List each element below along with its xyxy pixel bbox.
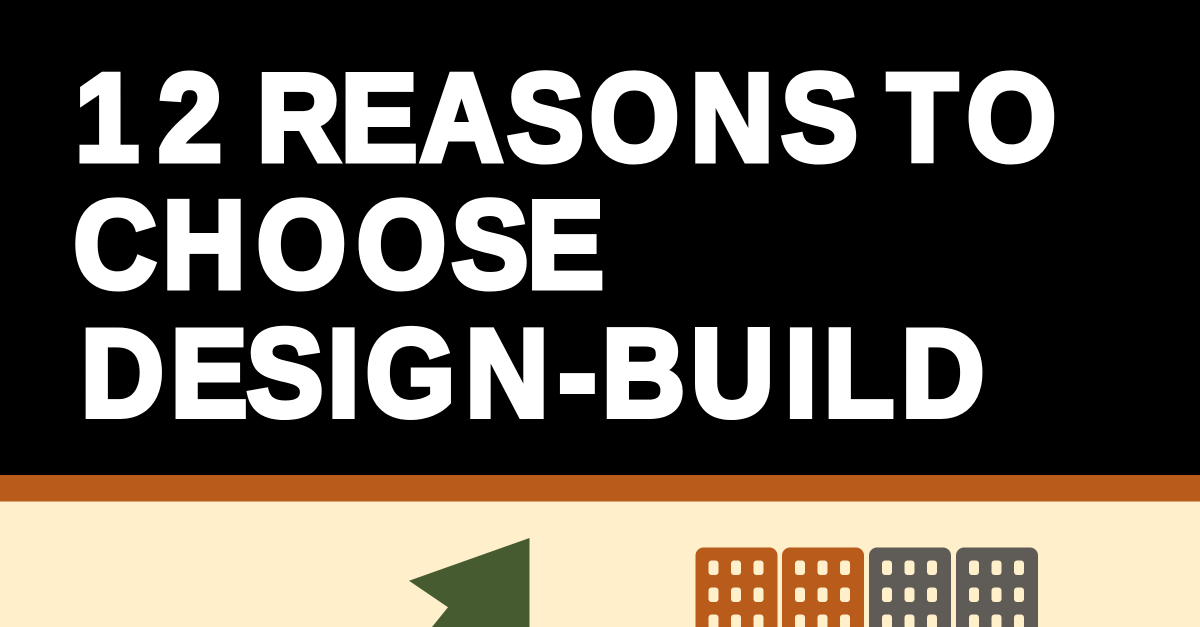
- icon: green flag: [409, 538, 530, 627]
- title: [73, 49, 1056, 443]
- title: 12 REASONS TO: [75, 49, 1056, 187]
- orange divider band: [0, 475, 1200, 502]
- title: DESIGN-BUILD: [81, 305, 985, 443]
- title: CHOOSE: [73, 177, 604, 315]
- cream lower panel: [0, 502, 1200, 627]
- icon: row of four buildings: [696, 548, 1038, 627]
